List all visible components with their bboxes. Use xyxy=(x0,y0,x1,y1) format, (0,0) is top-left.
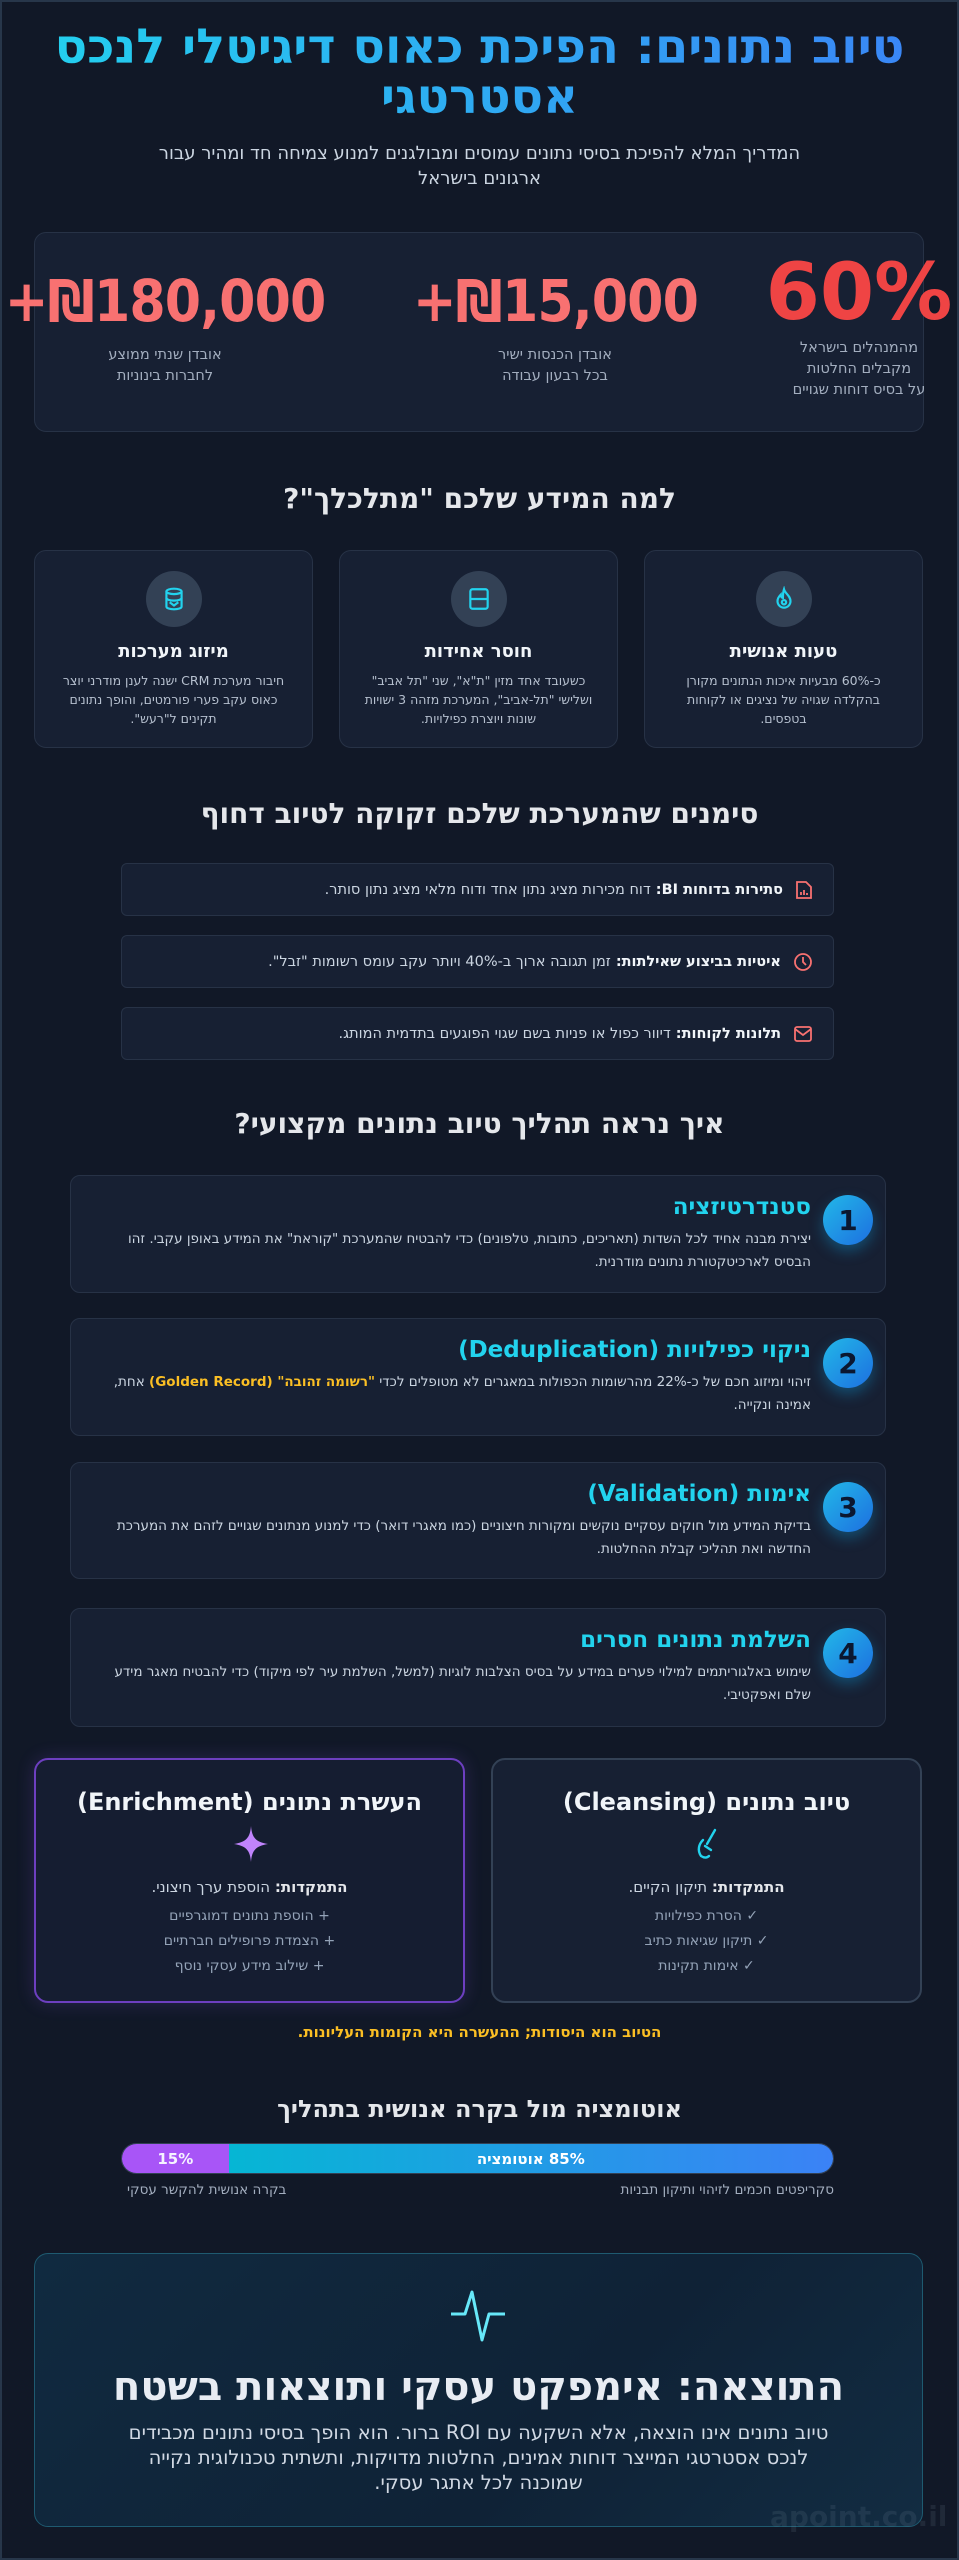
panel: cleansing: ✓ תיקון שגיאות כתיב xyxy=(644,1933,768,1949)
sign: complaints xyxy=(121,1007,834,1060)
bar chart: automation vs human xyxy=(121,2143,834,2174)
panel: enrichment: + הצמדת פרופילים חברתיים xyxy=(164,1933,335,1949)
step 4: שימוש באלגוריתמים למילוי פערים במידע על בסיס הצלבות לוגיות (למשל, השלמת עיר לפי מיקוד) כדי להבטיח מאגר מידע שלם ואפקטיבי. xyxy=(114,1664,811,1703)
icon: sparkle xyxy=(234,1826,268,1862)
card: human error: כ-60% מבעיות איכות הנתונים מקורן בהקלדה שגויה של נציגים או לקוחות בטפסים. xyxy=(686,673,881,726)
card: system merge xyxy=(34,550,313,748)
sign: slow queries: איטיות בביצוע שאילתות: xyxy=(616,954,781,970)
callout: note: הטיוב הוא היסודות; ההעשרה היא הקומות העליונות. xyxy=(298,2023,661,2041)
heading: automation: אוטומציה מול בקרה אנושית בתהליך xyxy=(277,2095,682,2123)
watermark: apoint.co.il xyxy=(770,2500,947,2533)
card: lack of uniformity: חוסר אחידות xyxy=(425,641,532,662)
stat: 60%: מהמנהלים בישראל xyxy=(800,340,918,356)
title: טיוב נתונים: הפיכת כאוס דיגיטלי לנכס xyxy=(55,19,904,75)
step 3: בדיקת המידע מול חוקים עסקיים נוקשים ומקורות חיצוניים (כמו מאגרי דואר) כדי למנוע מנתונים שגויים לזהם את המערכת החדשה ואת תהליכי קבלת ההחלטות. xyxy=(117,1518,811,1557)
card: human error: טעות אנושית xyxy=(730,641,837,662)
panel: enrichment xyxy=(34,1758,465,2003)
panel: cleansing xyxy=(491,1758,922,2003)
sign: BI: סתירות בדוחות BI: xyxy=(656,882,783,898)
panel: result xyxy=(34,2253,923,2527)
title xyxy=(0,22,959,122)
panel: stats xyxy=(34,232,924,432)
card: system merge: מיזוג מערכות xyxy=(118,641,229,662)
step 2: זיהוי ומיזוג חכם של כ-22% מהרשומות הכפולות במאגרים לא מטופלים לכדי "רשומה זהובה" (Golden Record) אחת, אמינה ונקייה. xyxy=(114,1374,811,1413)
step 4 xyxy=(70,1608,886,1727)
sign: BI xyxy=(121,863,834,916)
stat: 60%: מקבלים החלטות xyxy=(807,361,911,377)
subtitle: המדריך המלא להפיכת בסיסי נתונים עמוסים ומבולגנים למנוע צמיחה חד ומהיר עבור xyxy=(159,143,800,164)
card: system merge: חיבור מערכת CRM ישנה לענן מודרני יוצר כאוס עקב פערי פורמטים, והופך נתונים תקינים ל"רעש". xyxy=(63,673,284,726)
stat: 180,000 xyxy=(5,267,325,384)
step 2: ניקוי כפילויות (Deduplication) xyxy=(458,1337,811,1363)
stat: 15,000: אובדן הכנסות ישיר xyxy=(498,347,612,363)
icon: broom xyxy=(698,1828,716,1859)
step 1 xyxy=(70,1175,886,1293)
panel: enrichment: + הוספת נתונים דמוגרפיים xyxy=(169,1908,330,1924)
subtitle xyxy=(159,143,800,189)
icon: database xyxy=(146,571,202,627)
heading: signs: סימנים שהמערכת שלכם זקוקה לטיוב דחוף xyxy=(201,797,758,830)
subtitle: ארגונים בישראל xyxy=(418,168,541,189)
panel: enrichment: התמקדות: הוספת ערך חיצוני. xyxy=(151,1878,348,1896)
step 4: 4 xyxy=(838,1636,858,1670)
panel: cleansing: ✓ הסרת כפילויות xyxy=(655,1908,758,1924)
stat: 15,000: +₪15,000 xyxy=(412,267,698,335)
stat: 15,000: בכל רבעון עבודה xyxy=(502,368,608,384)
stat: 60%: 60% xyxy=(766,248,952,338)
sign: slow queries: זמן תגובה ארוך ב-40% ויותר עקב עומס רשומות "זבל". xyxy=(268,954,611,970)
step 3: אימות (Validation) xyxy=(587,1481,811,1507)
sign: slow queries xyxy=(121,935,834,988)
step 3 xyxy=(70,1462,886,1579)
stat: 60% xyxy=(766,248,952,398)
step 4: השלמת נתונים חסרים xyxy=(580,1627,811,1653)
panel: result: שמוכנה לכל אתגר עסקי. xyxy=(374,2471,583,2494)
heading: why data gets dirty: למה המידע שלכם "מתלכלך"? xyxy=(283,482,676,515)
panel: result: לנכס אסטרטגי המייצר דוחות אמינים, החלטות מדויקות, ותשתית טכנולוגית נקייה xyxy=(149,2446,808,2469)
stat: 15,000 xyxy=(412,267,698,384)
icon: flame xyxy=(756,571,812,627)
title: אסטרטגי xyxy=(381,69,578,125)
panel: result: התוצאה: אימפקט עסקי ותוצאות בשטח xyxy=(113,2364,844,2410)
bar chart: automation vs human: 85% אוטומציה xyxy=(477,2150,585,2168)
icon: pulse xyxy=(451,2290,505,2342)
heading: process: איך נראה תהליך טיוב נתונים מקצועי? xyxy=(234,1107,725,1140)
text: בקרה אנושית להקשר עסקי xyxy=(127,2182,286,2198)
sign: complaints: דיוור כפול או פניות בשם שגוי הפוגעים בתדמית המותג. xyxy=(339,1026,671,1042)
bar chart: automation vs human: 15% xyxy=(157,2150,193,2168)
step 1: 1 xyxy=(838,1204,858,1236)
stat: 180,000: +₪180,000 xyxy=(5,267,325,335)
step 1: יצירת מבנה אחיד לכל השדות (תאריכים, כתובות, טלפונים) כדי להבטיח שהמערכת "קוראת" את המידע באופן עקבי. זהו הבסיס לארכיטקטורת נתונים מודרנית. xyxy=(128,1231,811,1270)
panel: enrichment: + שילוב מידע עסקי נוסף xyxy=(175,1958,324,1974)
panel: cleansing: ✓ אימות תקינות xyxy=(658,1958,755,1974)
panel: result: טיוב נתונים אינו הוצאה, אלא השקעה עם ROI ברור. הוא הופך בסיסי נתונים מכבידים xyxy=(129,2421,828,2444)
bar labels xyxy=(127,2182,834,2198)
sign: BI: דוח מכירות מציג נתון אחד ודוח מלאי מציג נתון סותר. xyxy=(325,882,651,898)
panel: enrichment: העשרת נתונים (Enrichment) xyxy=(77,1788,422,1816)
card: human error xyxy=(644,550,923,748)
panel: cleansing: התמקדות: תיקון הקיים. xyxy=(628,1878,785,1896)
step 2: 2 xyxy=(838,1346,858,1380)
panel: cleansing: טיוב נתונים (Cleansing) xyxy=(563,1788,850,1816)
card: lack of uniformity xyxy=(339,550,618,748)
card: lack of uniformity: כשעובד אחד מזין "ת"א", שני "תל אביב" ושלישי "תל-אביב", המערכת מזהה 3 ישויות שונות ויוצרת כפילויות. xyxy=(365,673,592,726)
stat: 180,000: לחברות בינוניות xyxy=(117,368,213,384)
stat: 180,000: אובדן שנתי ממוצע xyxy=(108,347,222,363)
sign: complaints: תלונות לקוחות: xyxy=(676,1026,781,1042)
step 3: 3 xyxy=(838,1490,858,1524)
stat: 60%: על בסיס דוחות שגויים xyxy=(793,382,925,398)
step 2 xyxy=(70,1318,886,1436)
icon: layout xyxy=(451,571,507,627)
text: סקריפטים חכמים לזיהוי ותיקון תבניות xyxy=(621,2182,834,2198)
step 1: סטנדרטיזציה xyxy=(673,1194,811,1220)
